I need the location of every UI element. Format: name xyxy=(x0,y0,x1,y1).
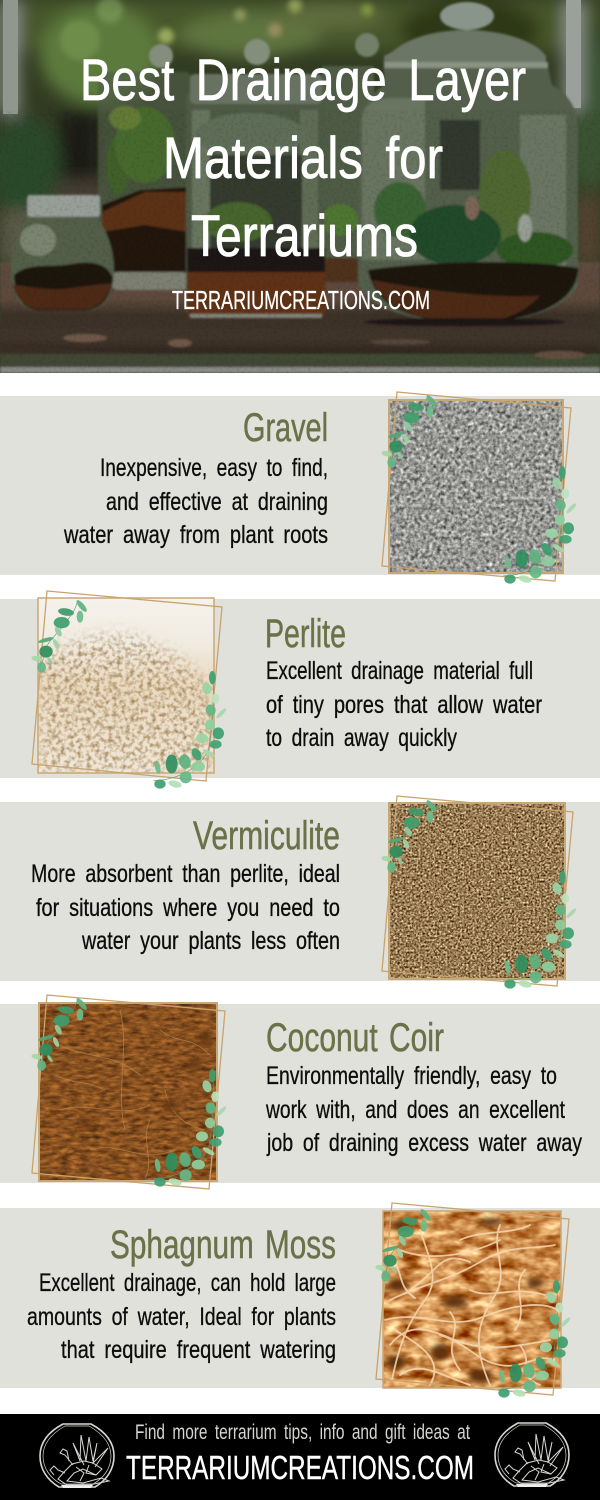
panel: sphagnum moss xyxy=(0,1203,600,1398)
text: vermiculite description: More absorbent than perlite, ideal xyxy=(31,860,340,888)
centre jar xyxy=(186,92,325,316)
icon: right terrarium bowl xyxy=(495,1423,569,1487)
frame: sphagnum moss xyxy=(376,1203,569,1395)
footer tagline: Find more terrarium tips, info and gift ideas at xyxy=(135,1421,470,1444)
title: Terrariums xyxy=(191,204,418,269)
panel: vermiculite xyxy=(0,796,600,989)
frame: perlite xyxy=(32,591,222,781)
large right jar xyxy=(358,68,578,322)
panel: gravel xyxy=(0,392,600,584)
heading: gravel: Gravel xyxy=(243,406,328,450)
icon: left terrarium bowl xyxy=(40,1424,114,1488)
small round jar xyxy=(11,218,114,310)
photo: coconut coir xyxy=(39,1003,217,1181)
leaves: gravel xyxy=(381,394,577,584)
text: sphagnum moss description xyxy=(27,1269,336,1364)
leaves: perlite xyxy=(31,599,227,789)
photo: sphagnum moss xyxy=(383,1211,561,1388)
panel: perlite xyxy=(0,591,600,789)
text: gravel description: water away from plant roots xyxy=(63,521,328,549)
frame: vermiculite xyxy=(382,796,573,986)
photo: perlite xyxy=(38,598,214,773)
text: gravel description: Inexpensive, easy to find, xyxy=(100,454,328,482)
text: sphagnum moss description: Excellent drainage, can hold large xyxy=(39,1269,336,1297)
text: vermiculite description xyxy=(31,860,340,955)
text: sphagnum moss description: amounts of water, Ideal for plants xyxy=(27,1303,336,1331)
text: perlite description: of tiny pores that allow water xyxy=(266,691,542,719)
text: gravel description xyxy=(63,454,328,549)
frame: coconut coir xyxy=(32,995,225,1189)
text: sphagnum moss description: that require frequent watering xyxy=(61,1336,336,1364)
text: gravel description: and effective at draining xyxy=(106,488,328,516)
heading: coconut coir: Coconut Coir xyxy=(266,1016,444,1060)
leaves: coconut coir xyxy=(31,997,227,1187)
photo: gravel xyxy=(389,400,563,573)
title xyxy=(80,48,526,269)
back-left jar xyxy=(98,72,193,276)
heading: vermiculite: Vermiculite xyxy=(193,814,340,858)
leaves: sphagnum moss xyxy=(375,1208,571,1398)
heading: perlite: Perlite xyxy=(265,612,346,656)
frame: gravel xyxy=(382,392,571,581)
text: coconut coir description xyxy=(265,1062,582,1157)
text: vermiculite description: water your plants less often xyxy=(81,927,340,955)
text: perlite description xyxy=(266,657,542,752)
text: vermiculite description: for situations where you need to xyxy=(36,894,340,922)
heading: sphagnum moss: Sphagnum Moss xyxy=(110,1223,336,1267)
photo: vermiculite xyxy=(389,803,565,979)
website subtitle: TERRARIUMCREATIONS.COM xyxy=(172,285,430,315)
bokeh xyxy=(60,0,373,60)
pillars xyxy=(3,0,18,114)
photo grain xyxy=(0,110,600,373)
hero photo: glass terrarium jars on a wooden table xyxy=(0,0,600,373)
leaves: vermiculite xyxy=(381,799,577,989)
footer banner xyxy=(0,1414,600,1500)
wooden table xyxy=(0,262,600,373)
back jar behind right xyxy=(322,66,374,281)
text: perlite description: to drain away quickly xyxy=(266,724,457,752)
footer website: TERRARIUMCREATIONS.COM xyxy=(126,1449,474,1486)
title: Materials for xyxy=(163,126,443,191)
panel: coconut coir xyxy=(0,995,600,1189)
